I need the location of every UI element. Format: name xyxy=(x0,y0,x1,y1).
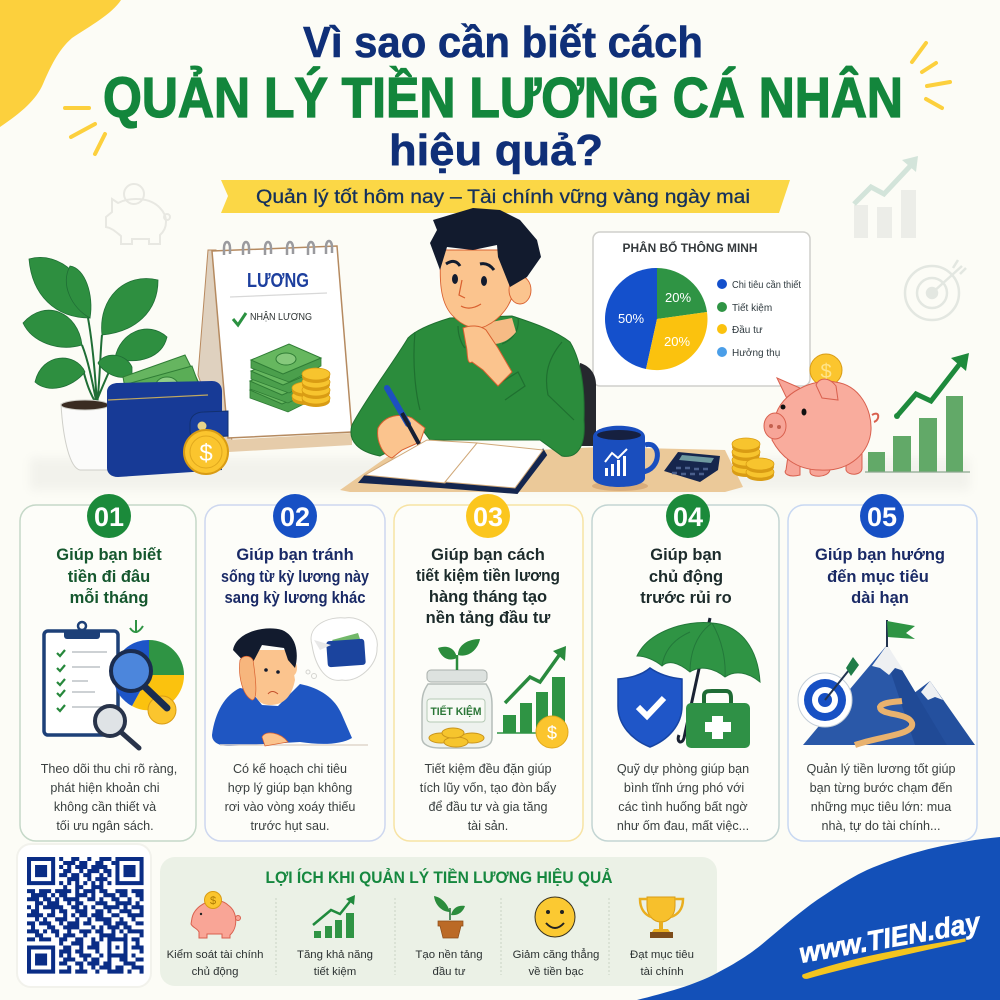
jar label: TIẾT KIỆM xyxy=(430,705,482,718)
check mark xyxy=(233,313,246,325)
piggy bank xyxy=(764,354,878,476)
heading 01: Giúp bạn biết xyxy=(56,546,162,564)
body 05: nhà, tự do tài chính... xyxy=(821,819,941,833)
mug xyxy=(592,426,657,491)
body 02: trước hụt sau. xyxy=(250,819,330,833)
legend: Tiết kiệm xyxy=(732,302,772,314)
faded icon: growth chart xyxy=(854,156,918,238)
writing hand xyxy=(378,415,425,458)
heading 04: trước rủi ro xyxy=(640,589,732,607)
person xyxy=(351,208,584,458)
mug chart icon xyxy=(605,449,627,476)
heading 02: sống từ kỳ lương này xyxy=(221,568,370,586)
benefit: reach goals: Đạt mục tiêu xyxy=(630,949,694,961)
chair xyxy=(578,363,596,446)
benefit: build foundation: Tạo nền tảng xyxy=(415,949,483,961)
legend xyxy=(717,279,801,359)
right sunburst accents xyxy=(912,43,950,108)
calendar xyxy=(198,241,352,452)
left sunburst accents xyxy=(65,108,105,154)
heading 03: hàng tháng tạo xyxy=(429,588,547,606)
benefit: increase savings xyxy=(297,895,373,978)
growth chart xyxy=(865,353,970,472)
hair xyxy=(430,208,541,287)
piggy coin: $ xyxy=(820,361,832,383)
badge 01 xyxy=(87,494,131,538)
pen xyxy=(387,388,427,458)
benefit: reach goals: tài chính xyxy=(640,966,684,978)
card 04 xyxy=(592,494,779,841)
calendar heading: LƯƠNG xyxy=(247,270,309,292)
body 05: Quản lý tiền lương tốt giúp xyxy=(806,762,956,776)
benefits panel xyxy=(160,857,717,986)
title line 3: hiệu quả? xyxy=(389,126,603,175)
heading 02: Giúp bạn tránh xyxy=(236,546,354,564)
benefit: increase savings: Tăng khả năng xyxy=(297,949,373,961)
ribbon subtitle xyxy=(221,180,790,213)
benefit: reduce stress: Giảm căng thẳng xyxy=(513,948,599,961)
coin stacks xyxy=(732,438,774,481)
heading 05: dài hạn xyxy=(851,589,909,607)
heading 03 xyxy=(416,546,560,627)
card 05 xyxy=(788,494,977,841)
body 01: tối ưu ngân sách. xyxy=(56,819,154,833)
illustration: clipboard and magnifier xyxy=(44,620,184,748)
eyes and mouth xyxy=(446,261,494,308)
card 01 xyxy=(20,494,196,841)
heading 01: tiền đi đâu xyxy=(68,568,150,586)
chin hand xyxy=(463,326,512,386)
thought bubble xyxy=(311,618,377,680)
body 03: tích lũy vốn, tạo đòn bẩy xyxy=(420,781,557,795)
jar label xyxy=(427,699,485,722)
legend: Chi tiêu cần thiết xyxy=(732,279,801,291)
card 03 xyxy=(394,494,583,841)
benefit: build foundation: đầu tư xyxy=(433,966,466,978)
body 04: như ốm đau, mất việc... xyxy=(617,819,749,833)
heading 05 xyxy=(815,546,945,607)
illustration: worried man and flying wallet xyxy=(212,618,377,746)
badge 04 xyxy=(666,494,710,538)
body 05: bạn từng bước chạm đến xyxy=(810,781,952,795)
ribbon subtitle: Quản lý tốt hôm nay – Tài chính vững vàng ngày mai xyxy=(256,186,750,208)
dollar coin: $ xyxy=(199,440,213,467)
website text: www.TIEN.day xyxy=(797,906,984,969)
heading 02 xyxy=(221,546,370,607)
panel title: PHÂN BỔ THÔNG MINH xyxy=(622,242,758,255)
heading 03: tiết kiệm tiền lương xyxy=(416,567,560,585)
illustration: mountain flag and target xyxy=(798,620,975,745)
benefit: control finances: chủ động xyxy=(192,966,238,978)
pie chart: 20% xyxy=(665,290,691,305)
title xyxy=(103,18,903,175)
body 03: tài sản. xyxy=(468,819,508,833)
legend: Đầu tư xyxy=(732,324,763,336)
blue corner wave with website xyxy=(637,837,1000,1000)
calendar rings xyxy=(224,241,332,255)
pie chart: 20% xyxy=(664,334,690,349)
faded icon: piggy bank xyxy=(106,184,170,244)
badge 05: 05 xyxy=(867,502,897,532)
body 02: Có kế hoạch chi tiêu xyxy=(233,762,347,776)
badge 03 xyxy=(466,494,510,538)
body 04: bình tĩnh ứng phó với xyxy=(624,781,744,795)
badge 01: 01 xyxy=(94,502,124,532)
illustration: savings jar and chart: $ xyxy=(547,723,557,743)
heading 03: nền tảng đầu tư xyxy=(426,609,550,627)
title line 2: QUẢN LÝ TIỀN LƯƠNG CÁ NHÂN xyxy=(103,65,903,130)
calendar label: NHẬN LƯƠNG xyxy=(250,310,312,323)
pie chart xyxy=(605,268,707,370)
heading 03: Giúp bạn cách xyxy=(431,546,545,564)
heading 04: chủ động xyxy=(649,568,723,586)
benefit: control finances: Kiểm soát tài chính xyxy=(167,949,263,961)
illustration: umbrella shield and first aid kit xyxy=(618,618,760,748)
body 05: những mục tiêu lớn: mua xyxy=(811,800,951,814)
body 04: các tình huống bất ngờ xyxy=(618,800,748,814)
body 01: phát hiện khoản chi xyxy=(50,781,160,795)
badge 03: 03 xyxy=(473,502,503,532)
benefits title: LỢI ÍCH KHI QUẢN LÝ TIỀN LƯƠNG HIỆU QUẢ xyxy=(266,868,613,887)
face xyxy=(440,250,515,328)
heading 01 xyxy=(56,546,162,607)
heading 05: đến mục tiêu xyxy=(827,568,929,586)
benefit: build foundation xyxy=(415,896,483,978)
badge 02 xyxy=(273,494,317,538)
body 02: rơi vào vòng xoáy thiếu xyxy=(225,800,355,814)
benefit: reach goals xyxy=(630,897,694,978)
sweater xyxy=(351,316,584,456)
body 04 xyxy=(617,762,749,833)
benefit: control finances xyxy=(167,892,263,978)
pie chart: 50% xyxy=(618,311,644,326)
title line 1: Vì sao cần biết cách xyxy=(303,18,703,67)
heading 05: Giúp bạn hướng xyxy=(815,546,945,564)
benefit: reduce stress: về tiền bạc xyxy=(528,966,584,978)
plant xyxy=(23,257,167,470)
floor band xyxy=(30,458,970,490)
legend: Hưởng thụ xyxy=(732,347,780,359)
body 01 xyxy=(41,762,177,833)
badge 04: 04 xyxy=(673,502,703,532)
illustration: savings jar and chart xyxy=(422,639,568,748)
benefit: control finances: $ xyxy=(210,895,216,907)
body 01: Theo dõi thu chi rõ ràng, xyxy=(41,762,177,776)
wallet xyxy=(107,355,228,477)
desk mat xyxy=(340,447,743,492)
body 01: không cần thiết và xyxy=(54,800,156,814)
heading 04 xyxy=(640,546,732,607)
body 03: Tiết kiệm đều đặn giúp xyxy=(425,762,551,776)
heading 01: mỗi tháng xyxy=(70,588,148,607)
yellow corner blob xyxy=(0,0,121,127)
body 05 xyxy=(806,762,956,833)
body 03: để đầu tư và gia tăng xyxy=(428,800,548,814)
body 04: Quỹ dự phòng giúp bạn xyxy=(617,762,749,776)
small bar chart xyxy=(503,677,565,733)
heading 04: Giúp bạn xyxy=(650,546,722,564)
benefit: increase savings: tiết kiệm xyxy=(314,966,356,978)
calculator xyxy=(664,452,720,482)
badge 05 xyxy=(860,494,904,538)
QR code card xyxy=(17,844,151,987)
pie chart panel xyxy=(593,232,810,386)
benefit: reduce stress xyxy=(513,897,599,978)
open notebook xyxy=(360,440,546,493)
ear xyxy=(509,276,531,304)
neck xyxy=(470,318,516,344)
cash stack xyxy=(250,344,330,412)
card 02 xyxy=(205,494,385,841)
heading 02: sang kỳ lương khác xyxy=(224,589,366,607)
faded icon: target xyxy=(905,260,966,320)
body 02 xyxy=(225,762,355,833)
body 02: hợp lý giúp bạn không xyxy=(228,781,352,795)
badge 02: 02 xyxy=(280,502,310,532)
yellow underline xyxy=(803,939,965,978)
body 03 xyxy=(420,762,557,833)
